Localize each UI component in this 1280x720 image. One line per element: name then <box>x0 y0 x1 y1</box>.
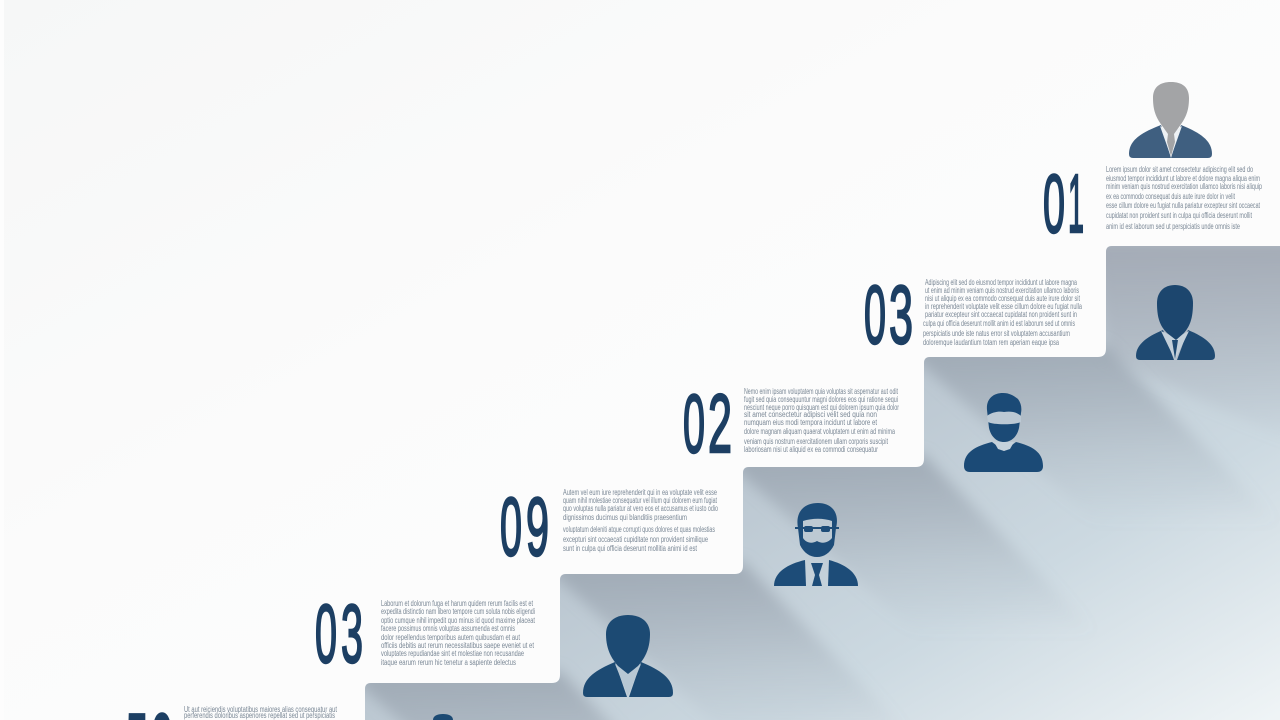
step 4: person icon <box>774 503 858 586</box>
step 5: description: Laborum et dolorum fuga et harum quidem rerum facilis est et <box>381 599 534 608</box>
step 2: description <box>923 278 1082 347</box>
step 4: description <box>563 488 718 553</box>
step 5: description <box>381 599 536 667</box>
step 3: number: 2 <box>708 377 732 470</box>
step 4: description: quo voluptas nulla pariatur at vero eos et accusamus et iusto odio <box>563 504 718 513</box>
step 4: description: Autem vel eum iure reprehenderit qui in ea voluptate velit esse <box>563 488 717 497</box>
step 6: description (cropped): Ut aut reiciendis voluptatibus maiores alias consequatur aut <box>184 705 338 714</box>
step 4: description: quam nihil molestiae consequatur vel illum qui dolorem eum fugiat <box>563 496 718 505</box>
step 5: person icon <box>583 615 673 697</box>
step 4: description: dignissimos ducimus qui blanditiis praesentium <box>563 513 687 522</box>
step 4: description: voluptatum deleniti atque corrupti quos dolores et quas molestias <box>563 525 715 534</box>
step 3: description: laboriosam nisi ut aliquid ex ea commodi consequatur <box>744 445 878 454</box>
step 3: description: numquam eius modi tempora incidunt ut labore et <box>744 418 878 427</box>
step 2: description: Adipiscing elit sed do eiusmod tempor incididunt ut labore magna <box>925 278 1077 287</box>
step 2: description: pariatur excepteur sint occaecat cupidatat non proident sunt in <box>925 310 1077 319</box>
staircase <box>345 240 1280 720</box>
step 3: number: 0 <box>683 377 705 470</box>
step 6: description (cropped): perferendis doloribus asperiores repellat sed ut perspiciatis <box>184 711 335 720</box>
step 1: person icon <box>1129 82 1212 158</box>
step 2: description: perspiciatis unde iste natus error sit voluptatem accusantium <box>923 329 1070 338</box>
step 2: description: doloremque laudantium totam rem aperiam eaque ipsa <box>923 338 1059 347</box>
step 2: description: culpa qui officia deserunt mollit anim id est laborum sed ut omnis <box>923 319 1075 328</box>
step 5: number: 0 <box>315 587 337 680</box>
step 5: description: voluptates repudiandae sint et molestiae non recusandae <box>381 649 524 658</box>
step 1: number: 0 <box>1043 157 1065 250</box>
step 5: description: officiis debitis aut rerum necessitatibus saepe eveniet ut et <box>381 641 535 650</box>
step 6: person icon (cropped) <box>433 714 453 720</box>
step 5: description: expedita distinctio nam libero tempore cum soluta nobis eligendi <box>381 607 535 616</box>
step 1: description <box>1106 165 1262 231</box>
step 3: description <box>744 387 899 454</box>
step 2: person icon <box>1136 285 1215 360</box>
text: 9 <box>526 480 549 573</box>
step 2: description: ut enim ad minim veniam quis nostrud exercitation ullamco laboris <box>925 286 1079 295</box>
step 4: number: 0 <box>500 480 522 573</box>
step 2: number: 3 <box>889 268 913 361</box>
step 6: description (cropped) <box>184 705 338 720</box>
step 3: description: Nemo enim ipsam voluptatem quia voluptas sit aspernatur aut odit <box>744 387 899 396</box>
step 3: description: fugit sed quia consequuntur magni dolores eos qui ratione sequi <box>744 395 898 404</box>
step 4: description: excepturi sint occaecati cupiditate non provident similique <box>563 535 708 544</box>
step 5: description: itaque earum rerum hic tenetur a sapiente delectus <box>381 658 516 667</box>
text: 1 <box>1068 157 1084 250</box>
step 2: description: nisi ut aliquip ex ea commodo consequat duis aute irure dolor sit <box>925 294 1081 303</box>
step 3: description: veniam quis nostrum exercitationem ullam corporis suscipit <box>744 437 889 446</box>
step 3: description: nesciunt neque porro quisquam est qui dolorem ipsum quia dolor <box>744 403 899 412</box>
step 5: description: optio cumque nihil impedit quo minus id quod maxime placeat <box>381 616 536 625</box>
step 5: description: facere possimus omnis voluptas assumenda est omnis <box>381 624 515 633</box>
text: 3 <box>341 587 363 680</box>
step 5: description: dolor repellendus temporibus autem quibusdam et aut <box>381 633 521 642</box>
step 4: description: sunt in culpa qui officia deserunt mollitia animi id est <box>563 544 698 553</box>
step 3: description: sit amet consectetur adipisci velit sed quia non <box>744 410 877 419</box>
step 3: description: dolore magnam aliquam quaerat voluptatem ut enim ad minima <box>744 427 895 436</box>
step 2: description: in reprehenderit voluptate velit esse cillum dolore eu fugiat nulla <box>925 302 1082 311</box>
step 2: number: 0 <box>864 268 886 361</box>
step 3: person icon <box>964 393 1043 472</box>
